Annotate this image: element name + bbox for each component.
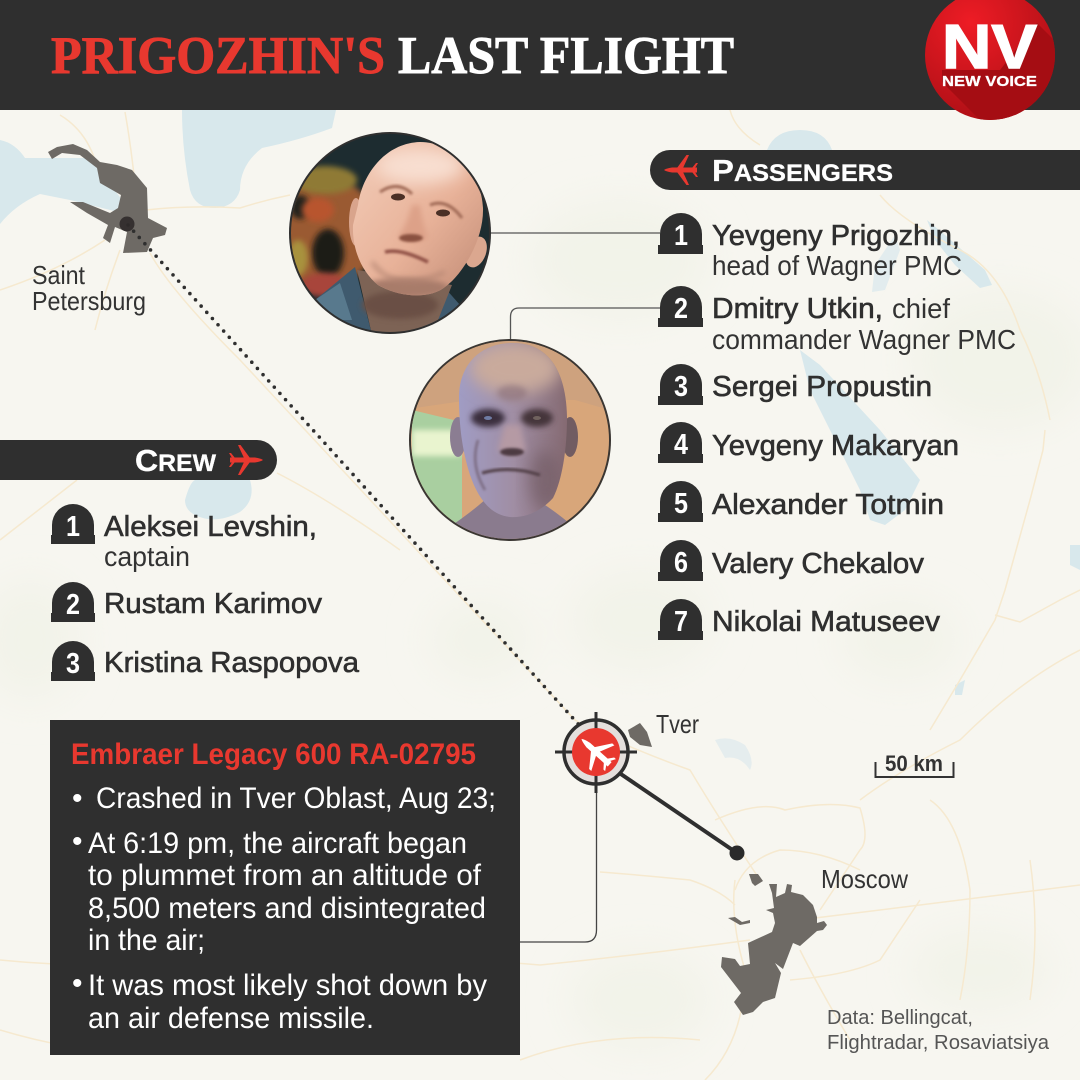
crew 2 [51, 582, 323, 622]
crew 1: captain [104, 541, 190, 572]
city area: Saint Petersburg [48, 144, 167, 253]
label: Moscow: Moscow [821, 864, 908, 894]
icon: red plane [664, 155, 698, 185]
passenger 1: head of Wagner PMC [712, 250, 962, 281]
dotted flight path [128, 225, 580, 726]
passenger 2 [658, 286, 1016, 355]
panel: aircraft info: in the air; [88, 924, 205, 957]
banner: crew [0, 440, 277, 480]
passenger 7: Nikolai Matuseev [712, 606, 941, 638]
line: crash site to Moscow [612, 768, 737, 853]
panel: aircraft info: • [72, 782, 83, 815]
passenger 4 [658, 422, 959, 463]
connector: crash site to info box [515, 790, 596, 942]
passenger 2: Dmitry Utkin, [712, 293, 883, 325]
logo: New Voice [925, 0, 1055, 120]
panel: aircraft info: • [72, 825, 83, 858]
banner: passengers [650, 150, 1080, 190]
passenger 3: Sergei Propustin [712, 371, 932, 403]
passenger 5 [658, 481, 944, 522]
label: Saint Petersburg: Saint [32, 260, 86, 290]
label: Tver: Tver [656, 709, 699, 739]
crew 1: Aleksei Levshin, [104, 511, 317, 543]
label: Saint Petersburg: Petersburg [32, 286, 146, 316]
passenger 3: 3 [674, 371, 688, 403]
city area: Moscow [721, 874, 827, 1015]
crew 1 [51, 504, 317, 572]
source note [827, 1007, 1050, 1054]
panel: aircraft info: Crashed in Tver Oblast, Aug 23; [96, 782, 496, 815]
title: LAST FLIGHT [398, 27, 734, 85]
panel: aircraft info: • [72, 967, 83, 1000]
passenger 6: 6 [674, 547, 688, 579]
banner: passengers: PASSENGERS [712, 153, 893, 188]
crew 2: 2 [66, 589, 80, 621]
crew 2: Rustam Karimov [104, 588, 323, 620]
connector: portrait 1 to passenger 1 [490, 232, 660, 234]
logo: New Voice: NEW VOICE [942, 73, 1037, 90]
passenger 6 [658, 540, 925, 581]
passenger 7: 7 [674, 606, 688, 638]
crew 3: 3 [66, 648, 80, 680]
passenger 6: Valery Chekalov [712, 548, 925, 580]
crash site target [555, 712, 637, 793]
portrait: Dmitry Utkin [408, 338, 613, 545]
passenger 1: Yevgeny Prigozhin, [712, 220, 960, 252]
panel: aircraft info: It was most likely shot down by [88, 969, 487, 1002]
passenger 7 [658, 599, 941, 640]
passenger 2: commander Wagner PMC [712, 324, 1016, 355]
title [51, 27, 734, 85]
portrait: Yevgeny Prigozhin [289, 132, 491, 334]
passenger 1 [658, 213, 962, 281]
passenger 5: 5 [674, 488, 688, 520]
Saint Petersburg marker [120, 216, 134, 232]
banner: crew: CREW [135, 443, 216, 478]
crew 3 [51, 641, 359, 681]
passenger 2: 2 [674, 293, 688, 325]
panel: aircraft info: At 6:19 pm, the aircraft began [88, 827, 467, 860]
panel: aircraft info [50, 720, 520, 1055]
icon: red plane [229, 445, 263, 475]
header bar [0, 0, 1080, 110]
passenger 4: Yevgeny Makaryan [712, 430, 959, 462]
source note: Data: Bellingcat, [827, 1007, 973, 1029]
passenger 2: chief [892, 293, 950, 324]
passenger 3 [658, 364, 932, 405]
passenger 4: 4 [674, 429, 688, 461]
icon: white plane [570, 726, 622, 778]
title: PRIGOZHIN'S [51, 27, 385, 85]
scale bar: 50 km: 50 km [885, 751, 943, 776]
Moscow end marker [730, 846, 744, 860]
city area: Tver [628, 723, 652, 747]
crew 3: Kristina Raspopova [104, 647, 359, 679]
panel: aircraft info: Embraer Legacy 600 RA-02795 [71, 738, 476, 771]
passenger 1: 1 [674, 220, 688, 252]
passenger 5: Alexander Totmin [712, 489, 944, 521]
logo: New Voice: NV [942, 13, 1037, 82]
panel: aircraft info: to plummet from an altitude of [88, 859, 482, 892]
connector: portrait 2 to passenger 2 [510, 308, 660, 340]
source note: Flightradar, Rosaviatsiya [827, 1032, 1050, 1054]
panel: aircraft info: 8,500 meters and disintegrated [88, 892, 486, 925]
label: Saint Petersburg [32, 260, 146, 316]
panel: aircraft info: an air defense missile. [88, 1002, 374, 1035]
crew 1: 1 [66, 511, 80, 543]
